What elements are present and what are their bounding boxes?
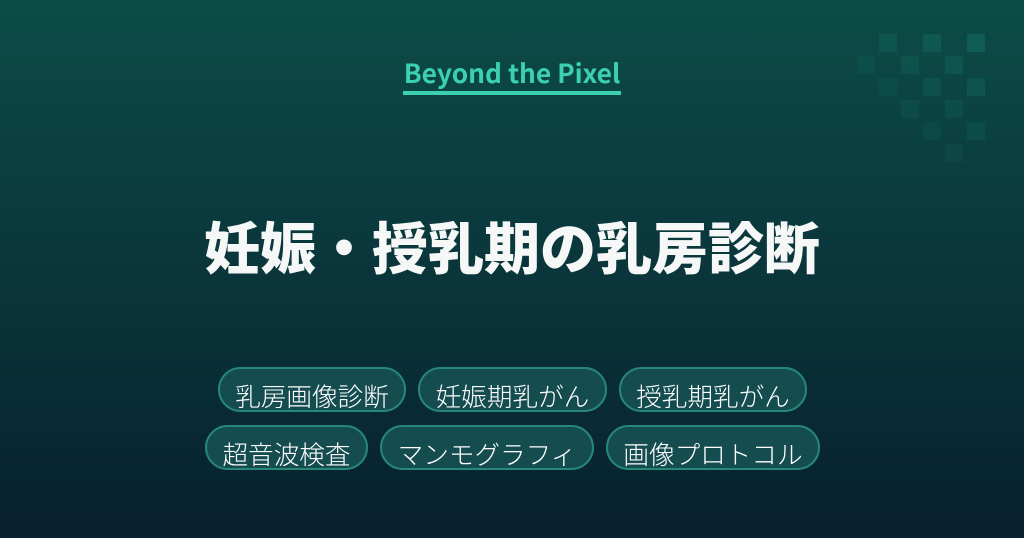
tag: breast imaging [218,367,406,412]
tag: ultrasound: 超音波検査 [222,435,350,472]
tag: mammography: マンモグラフィ [398,435,576,472]
tag: breast imaging: 乳房画像診断 [235,377,389,414]
tag: imaging protocol: 画像プロトコル [623,435,803,472]
title: 妊娠・授乳期の乳房診断 [204,205,820,286]
brand label with underline: Beyond the Pixel [404,52,620,91]
decorative pixel grid [879,34,985,140]
tag: lactation breast cancer: 授乳期乳がん [636,377,790,414]
tag: pregnancy breast cancer [418,367,607,412]
tag: imaging protocol [606,425,820,470]
tag: pregnancy breast cancer: 妊娠期乳がん [436,377,589,414]
tag: ultrasound [205,425,368,470]
tag: mammography [380,425,594,470]
tag: lactation breast cancer [619,367,807,412]
